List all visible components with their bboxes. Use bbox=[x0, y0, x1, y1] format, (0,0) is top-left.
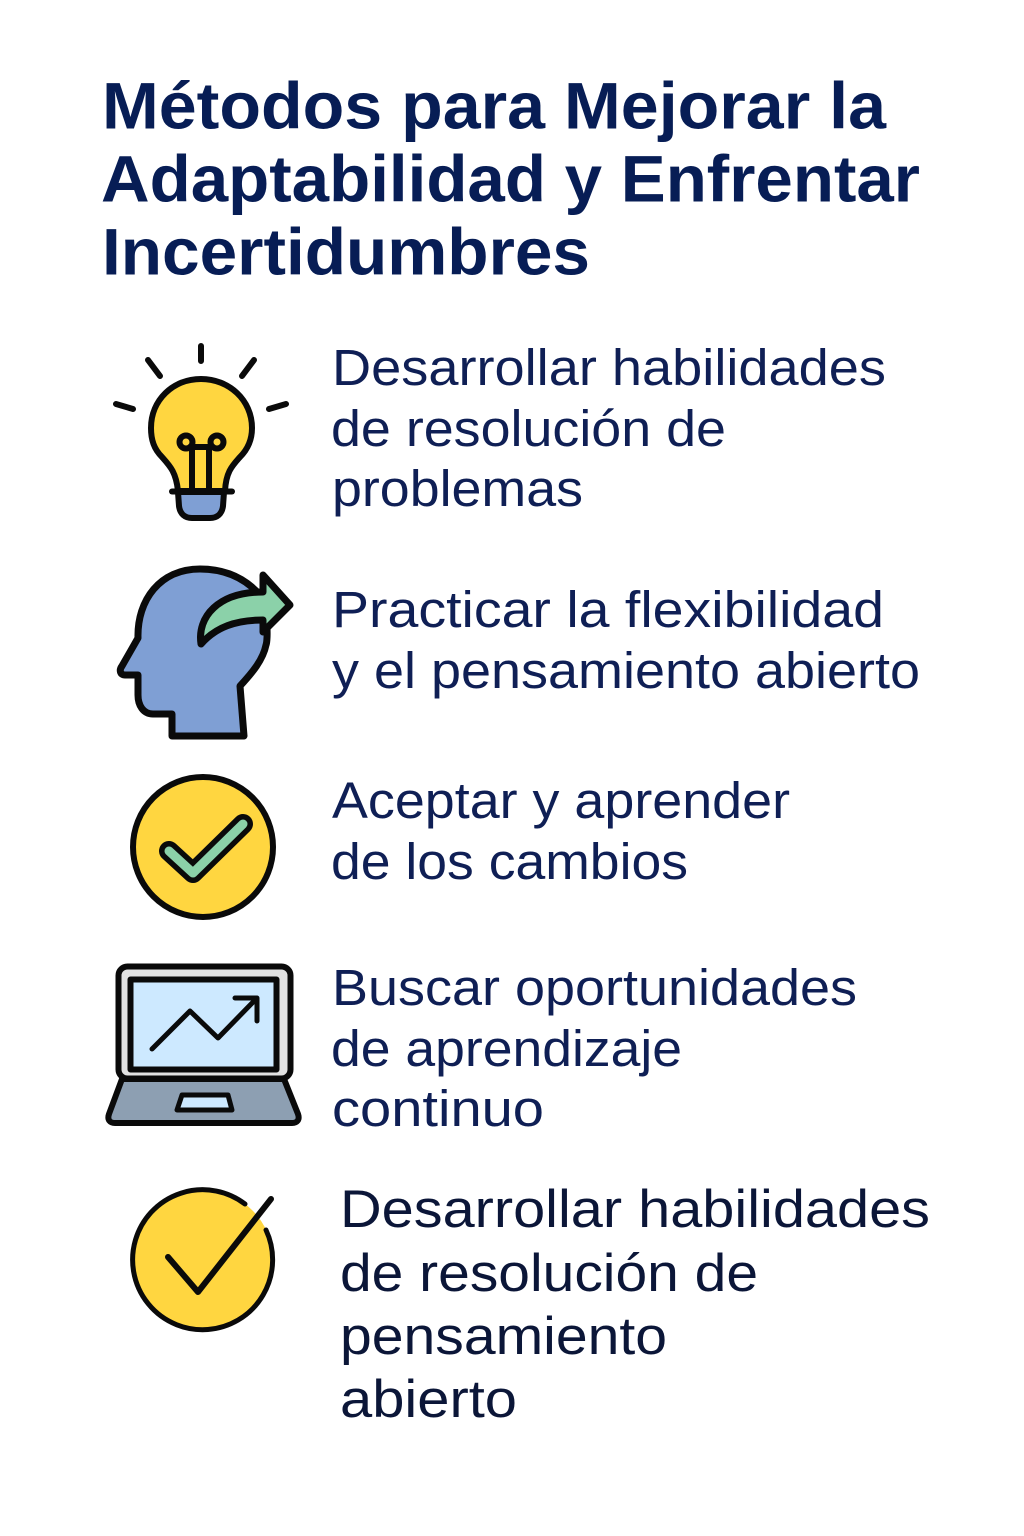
text: item 4: de aprendizaje bbox=[331, 1020, 682, 1077]
text: item 1 bbox=[331, 339, 886, 517]
text: item 4: continuo bbox=[332, 1080, 544, 1137]
text: item 3 bbox=[331, 772, 790, 890]
panel: item 1, problem solving bbox=[116, 339, 886, 518]
text: item 3: Aceptar y aprender bbox=[332, 772, 790, 829]
icon: yellow circle with black check bbox=[133, 1190, 273, 1330]
icon: yellow circle with green check bbox=[133, 777, 273, 917]
text: item 5: pensamiento bbox=[340, 1307, 667, 1366]
text: item 5: abierto bbox=[340, 1370, 517, 1429]
icon: laptop with growth chart bbox=[108, 966, 299, 1123]
panel: item 2, flexibility bbox=[120, 569, 920, 736]
icon: head with arrow bbox=[120, 569, 290, 736]
title: Métodos para Mejorar la bbox=[102, 68, 887, 142]
text: item 1: Desarrollar habilidades bbox=[332, 339, 886, 396]
text: item 2: y el pensamiento abierto bbox=[332, 642, 920, 699]
text: item 2: Practicar la flexibilidad bbox=[332, 581, 884, 638]
title: Adaptabilidad y Enfrentar bbox=[101, 142, 920, 216]
icon: light bulb bbox=[116, 346, 286, 518]
text: item 5: Desarrollar habilidades bbox=[340, 1180, 930, 1239]
panel: item 3, accept change bbox=[133, 772, 790, 917]
text: item 1: problemas bbox=[332, 460, 583, 517]
text: item 5: de resolución de bbox=[340, 1244, 758, 1303]
panel: item 4, continuous learning bbox=[108, 959, 857, 1137]
text: item 4: Buscar oportunidades bbox=[332, 959, 857, 1016]
title bbox=[101, 68, 920, 288]
text: item 2 bbox=[332, 581, 920, 699]
text: item 4 bbox=[331, 959, 857, 1137]
panel: item 5, open thinking bbox=[133, 1180, 930, 1429]
text: item 3: de los cambios bbox=[331, 833, 688, 890]
text: item 5 bbox=[340, 1180, 930, 1429]
text: item 1: de resolución de bbox=[331, 400, 726, 457]
title: Incertidumbres bbox=[102, 214, 590, 288]
